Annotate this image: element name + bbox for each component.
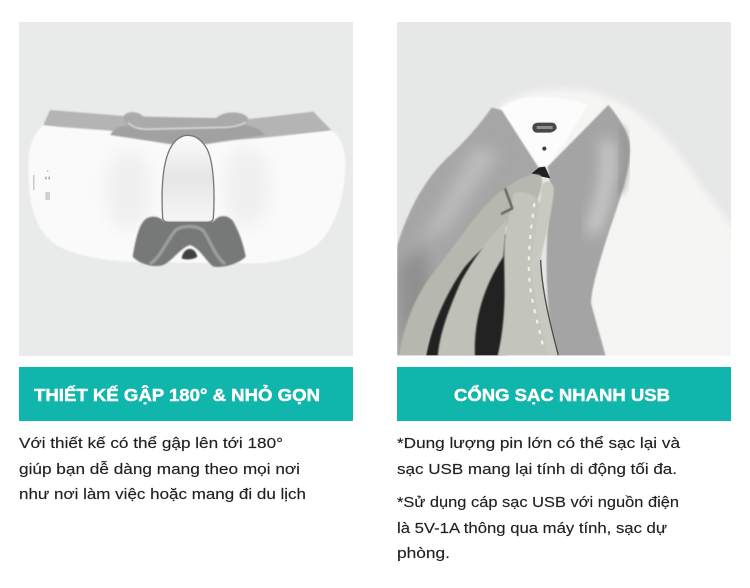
text: battery note: sạc USB mang lại tính di động tối đa. <box>397 462 677 478</box>
text: battery note: *Dung lượng pin lớn có thể sạc lại và <box>397 436 681 452</box>
edge strap <box>531 181 559 360</box>
right grey flap <box>547 105 630 360</box>
photo: USB port close-up <box>395 22 738 360</box>
text: charging cable note: *Sử dụng cáp sạc USB với nguồn điện <box>397 495 679 511</box>
fabric strap main <box>496 192 550 356</box>
heading bar: foldable design: THIẾT KẾ GẬP 180° & NHỎ GỌN <box>34 384 320 405</box>
top strap loop <box>123 112 248 129</box>
text: charging cable note: phòng. <box>397 546 450 562</box>
mask top grey band <box>43 110 332 139</box>
hinge gap <box>532 167 550 178</box>
text: charging cable note <box>397 495 679 562</box>
centre hinge <box>162 135 214 223</box>
side buttons <box>33 170 50 200</box>
nose pad <box>133 216 246 267</box>
soft body shading <box>105 150 152 230</box>
text: foldable description: như nơi làm việc hoặc mang đi du lịch <box>19 487 306 503</box>
fabric strap left <box>398 174 542 360</box>
text: foldable description <box>19 436 306 503</box>
heading bar: USB charging: CỔNG SẠC NHANH USB <box>454 384 670 405</box>
dark gap <box>425 233 508 360</box>
panel: foldable design <box>19 22 353 503</box>
heading bar: foldable design <box>19 367 353 421</box>
text: battery note <box>397 436 681 478</box>
folds and stitches <box>501 188 512 214</box>
text: foldable description: giúp bạn dễ dàng mang theo mọi nơi <box>19 461 300 478</box>
mask white body <box>28 126 345 263</box>
text: charging cable note: là 5V-1A thông qua máy tính, sạc dự <box>397 521 667 537</box>
indicator dot <box>542 147 546 151</box>
heading bar: USB charging <box>397 367 731 421</box>
panel: USB charging <box>395 22 738 562</box>
USB port <box>532 123 557 133</box>
white shell <box>498 89 738 360</box>
nose pad inner seam <box>150 226 225 264</box>
left grey flap <box>395 108 538 360</box>
photo: folded eye massager <box>19 22 353 356</box>
text: foldable description: Với thiết kế có thể gập lên tới 180° <box>19 436 283 452</box>
nose strap base <box>110 125 265 144</box>
